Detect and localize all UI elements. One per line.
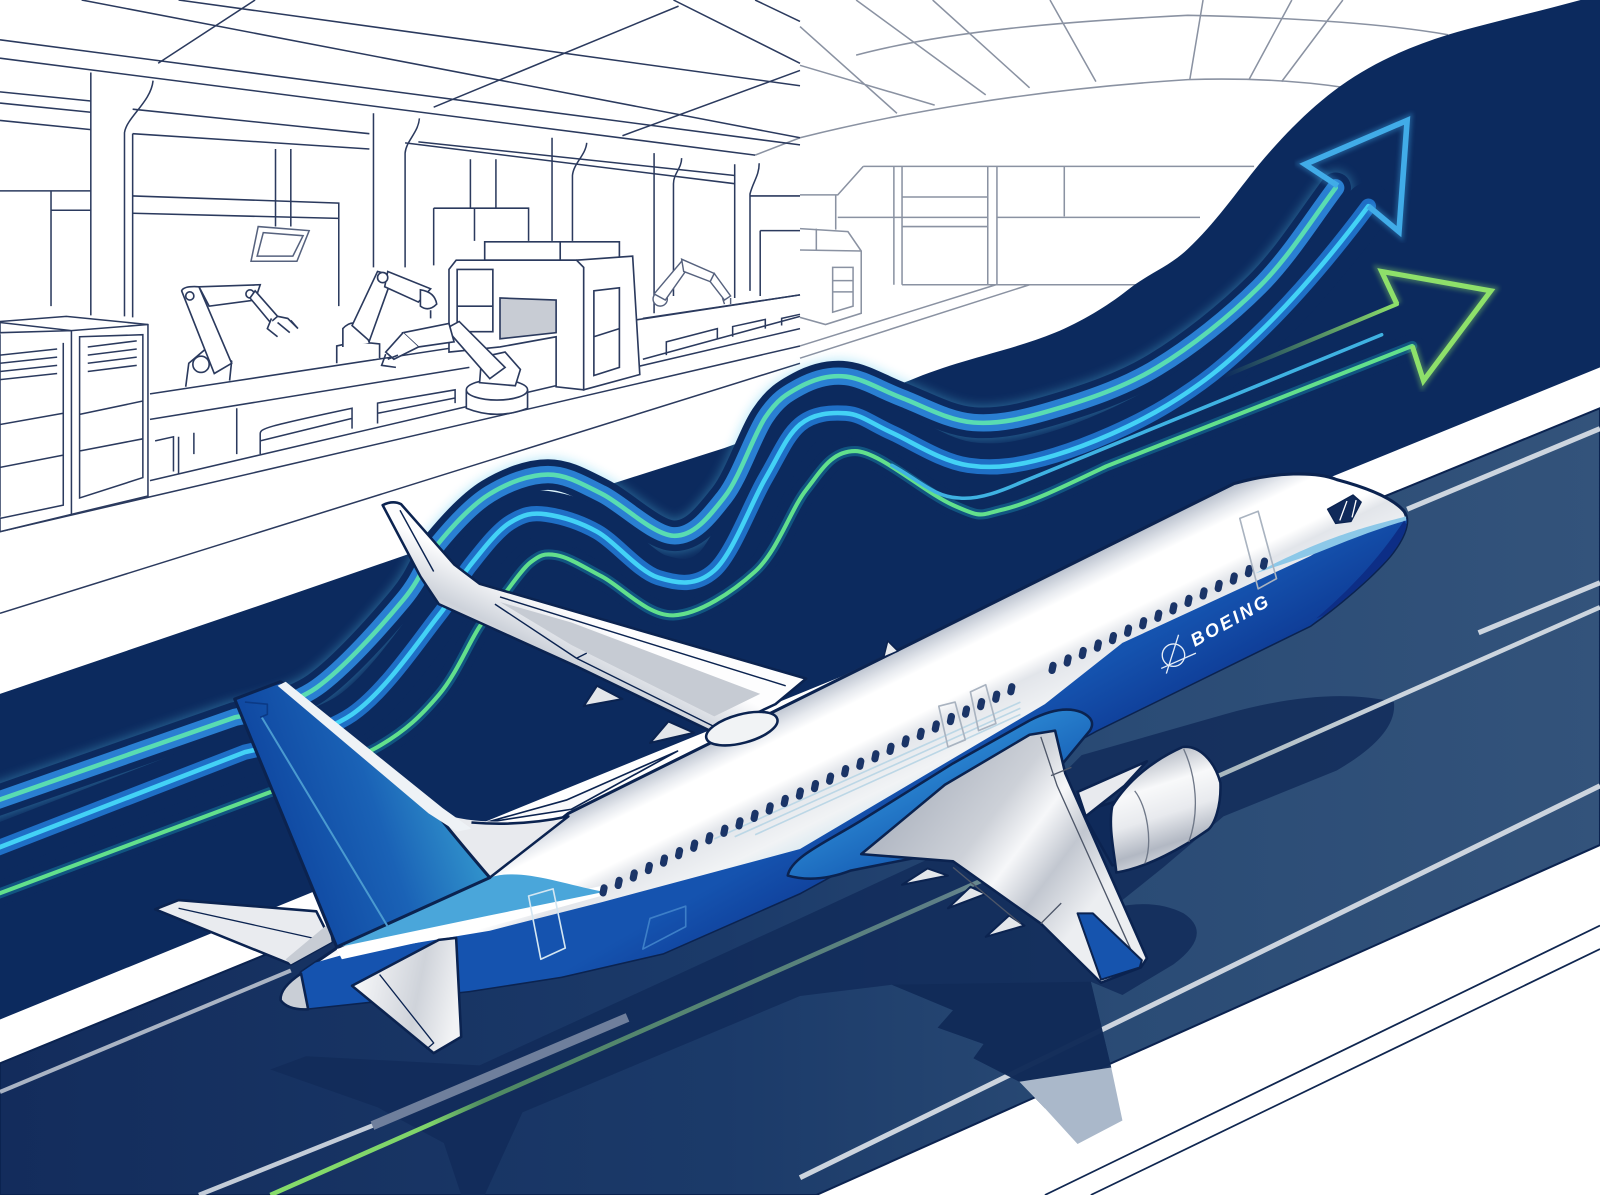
blue belly livery xyxy=(286,516,1418,1020)
windows xyxy=(603,561,1264,893)
top stream xyxy=(0,188,1336,803)
factory: left roof beams xyxy=(0,0,800,184)
monitor xyxy=(251,227,309,261)
boeing logo mark xyxy=(1161,635,1196,674)
cockpit windows xyxy=(1328,495,1361,524)
winglet xyxy=(1078,913,1142,980)
robot arm 1 xyxy=(182,285,298,387)
lower stream xyxy=(0,346,1412,897)
horizontal stabilizer far xyxy=(155,900,332,964)
runway centre markings xyxy=(199,607,1600,1195)
wing-root fairing xyxy=(788,710,1092,879)
arrowhead: blue xyxy=(1305,120,1407,232)
antenna xyxy=(884,641,898,657)
factory: ceiling grid xyxy=(755,0,1448,155)
server cabinets xyxy=(0,316,148,532)
runway surface xyxy=(0,408,1600,1195)
rear fuselage swoosh xyxy=(339,874,604,947)
near wing flap pods xyxy=(902,868,1024,937)
runway edge markings xyxy=(0,429,1600,1195)
near wing xyxy=(861,731,1147,983)
fin root fairing xyxy=(439,812,568,878)
fuselage xyxy=(301,474,1407,1008)
far wing xyxy=(383,502,806,733)
green tail streak xyxy=(1223,304,1397,377)
far wing flap pods xyxy=(584,686,694,743)
fin root edge line xyxy=(471,816,568,878)
middle stream xyxy=(0,206,1368,851)
factory: columns and ducts xyxy=(0,72,800,317)
factory: conveyor and floor lines xyxy=(0,295,800,613)
engine and pylon xyxy=(1078,747,1221,873)
near stabilizer xyxy=(352,938,461,1053)
robot arm 3 xyxy=(382,321,528,414)
cheatline stripes xyxy=(714,702,1020,839)
far wing root fairing xyxy=(703,705,781,752)
vertical fin xyxy=(235,682,490,947)
aircraft shadow on runway xyxy=(270,696,1394,1195)
distant robot arm xyxy=(653,259,731,306)
blue and green trend lines xyxy=(0,188,1412,897)
aircraft xyxy=(155,474,1418,1053)
thin cyan streak xyxy=(892,335,1382,498)
halo of trend lines xyxy=(0,188,1412,897)
dorsal strip xyxy=(486,751,678,823)
factory: right hall structure xyxy=(800,166,1254,358)
tail cone xyxy=(281,974,308,1009)
wordmark: BOEING: BOEING xyxy=(1187,589,1274,650)
robot arm 2 xyxy=(337,271,437,363)
door outlines xyxy=(529,511,1277,959)
processing machine xyxy=(449,242,640,390)
arrowhead: green xyxy=(1382,271,1491,381)
